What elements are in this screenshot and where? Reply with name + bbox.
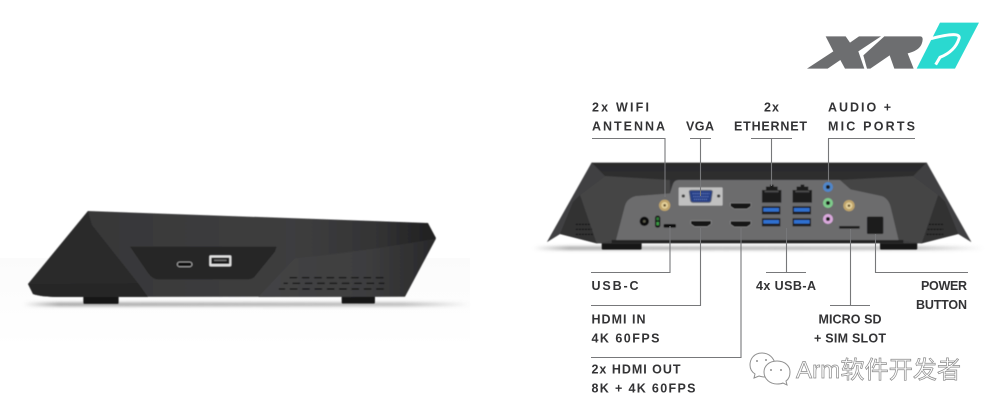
rear right wing [913, 163, 971, 242]
side foot right [342, 295, 375, 304]
rear usb-c [664, 224, 676, 228]
numeral 2 cutout [931, 35, 959, 65]
label: vga: VGA [686, 120, 714, 134]
ethernet ports [762, 185, 812, 203]
rear shadow [533, 247, 983, 250]
label: power button [876, 234, 968, 312]
rear right facet [840, 176, 938, 243]
usb-a ports [762, 206, 811, 226]
side port inset [130, 247, 277, 279]
label: wifi antenna: 2x WIFI [592, 100, 649, 114]
hdmi out top [730, 203, 751, 209]
letter R [863, 36, 923, 69]
usb-c port [177, 262, 192, 267]
label: audio and mic: AUDIO + [828, 100, 891, 114]
usb-a port [209, 255, 231, 266]
rear right vent [927, 224, 943, 234]
rear foot left [602, 241, 642, 250]
label: ethernet: ETHERNET [734, 120, 807, 134]
power jack [640, 217, 649, 226]
side shadow [23, 303, 470, 306]
rear port panel [616, 180, 899, 240]
label: usb-c: USB-C [592, 279, 638, 293]
side foot left [83, 295, 119, 304]
wifi antenna right [843, 200, 855, 211]
rear right vent zone [922, 195, 958, 243]
label: power button: POWER [921, 279, 967, 293]
label: vga [686, 120, 714, 196]
rear foot right [880, 241, 917, 250]
rear left vent zone [560, 195, 597, 243]
label: hdmi out: 8K + 4K 60FPS [592, 382, 696, 396]
rear left wing [547, 163, 605, 242]
label: ethernet: 2x [764, 100, 779, 114]
rear left vent [576, 224, 593, 234]
watermark [750, 353, 961, 385]
power button [867, 217, 883, 234]
label: micro sd: + SIM SLOT [814, 332, 886, 346]
label: hdmi in: 4K 60FPS [592, 332, 660, 346]
side view of device [23, 211, 470, 306]
rear left facet [580, 176, 670, 243]
label: hdmi in: HDMI IN [592, 312, 646, 326]
rear body silhouette [547, 163, 971, 243]
label: hdmi out [591, 228, 741, 396]
letter X [807, 36, 881, 69]
numeral 2 badge [917, 23, 979, 69]
label: audio and mic: MIC PORTS [828, 120, 915, 134]
rear base strip [612, 240, 903, 243]
label: wifi antenna: ANTENNA [592, 120, 665, 134]
label: micro sd: MICRO SD [818, 312, 882, 326]
hdmi in [691, 221, 711, 227]
label: audio and mic [828, 100, 915, 182]
label: hdmi out: 2x HDMI OUT [592, 362, 681, 376]
label: wifi antenna [592, 100, 665, 197]
side vent [279, 278, 384, 289]
hdmi out bottom [730, 221, 751, 227]
watermark text: Arm软件开发者 [796, 357, 961, 384]
wechat icon [750, 353, 790, 385]
label: power button: BUTTON [916, 298, 967, 312]
label: ethernet [734, 100, 807, 186]
label: hdmi in [591, 228, 700, 346]
side left facet [28, 211, 138, 284]
audio jacks [823, 182, 833, 224]
side lower right panel [258, 239, 436, 297]
label: usb-c [591, 226, 670, 293]
wifi antenna left [659, 200, 670, 211]
label: usb-a: 4x USB-A [756, 279, 816, 293]
rear view of device [533, 163, 983, 250]
label: usb-a [756, 228, 816, 293]
status led switch [655, 216, 660, 228]
vga port [679, 187, 723, 206]
side lower left band [28, 283, 148, 297]
label: micro sd [814, 229, 886, 346]
XR2 logo [807, 23, 979, 69]
side body [28, 211, 436, 297]
micro sd slot [839, 226, 860, 229]
